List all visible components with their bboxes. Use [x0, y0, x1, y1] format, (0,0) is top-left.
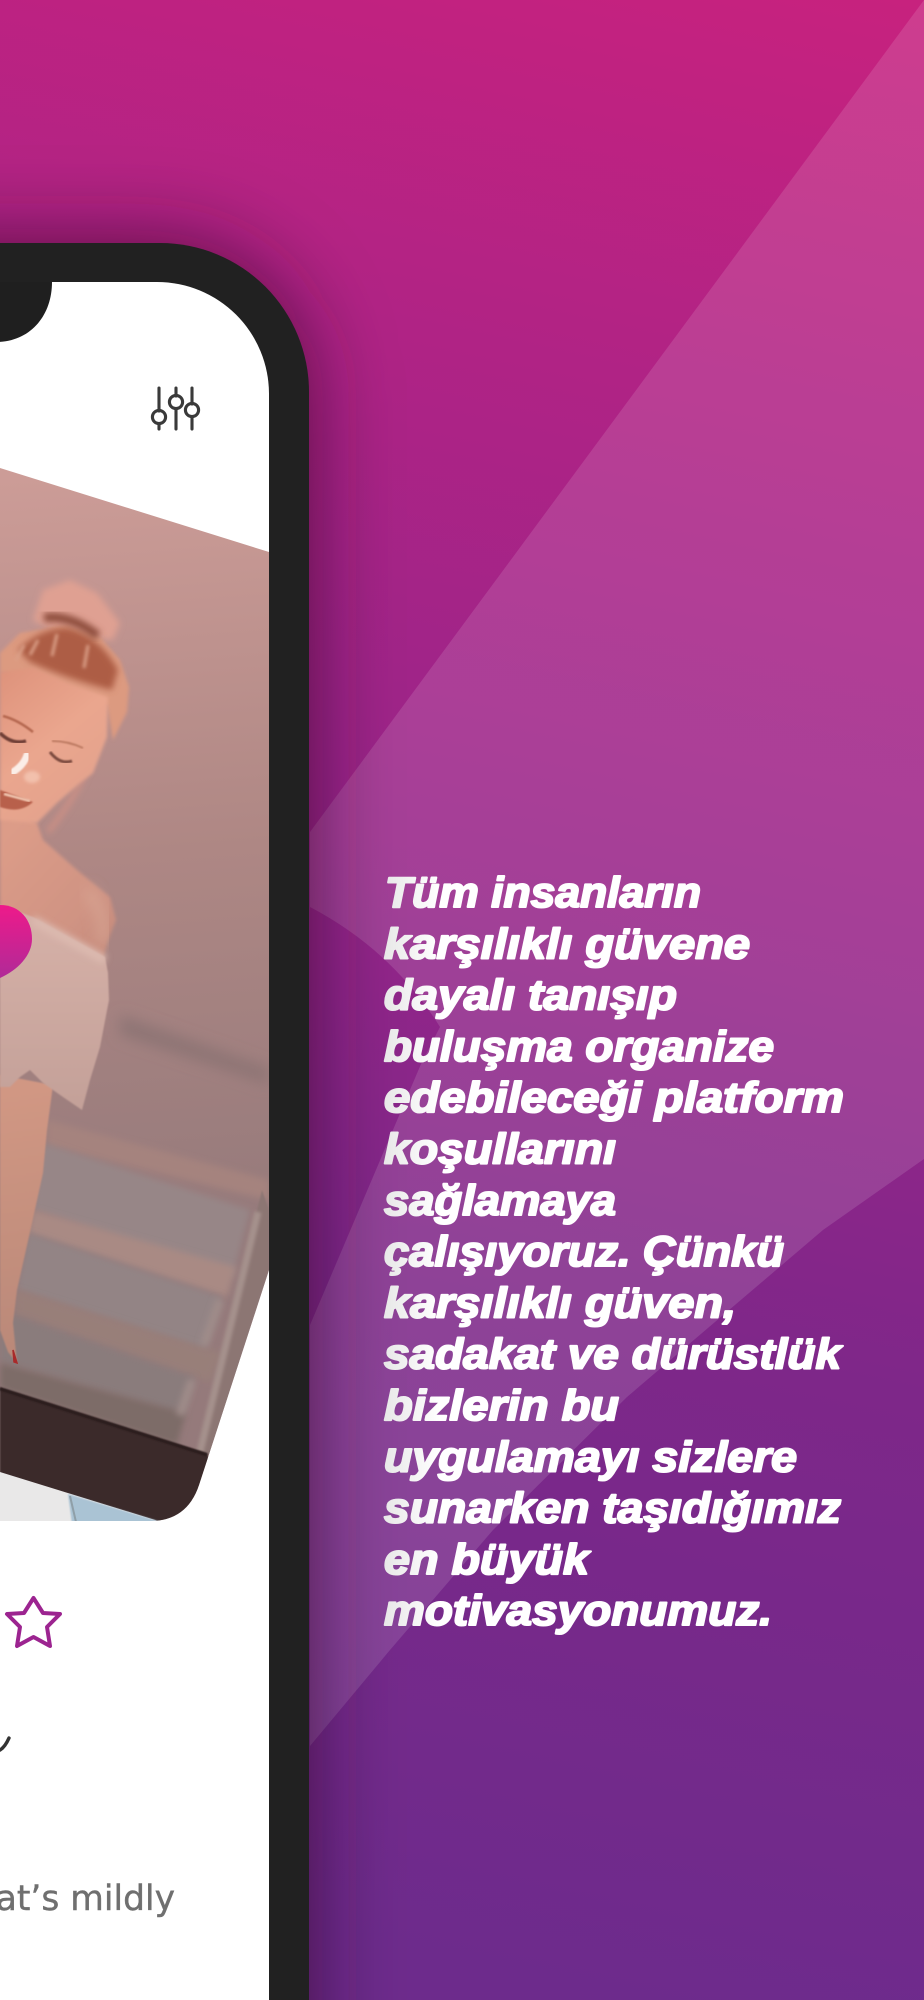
- woman: face: [0, 668, 108, 823]
- main text block: sadakat ve dürüstlük: [384, 1331, 843, 1379]
- background: light diagonal facet: [310, 0, 924, 1746]
- main text block: koşullarını: [384, 1126, 616, 1174]
- main text block: karşılıklı güven,: [384, 1279, 736, 1327]
- stairs: [0, 1015, 269, 1455]
- main text block: en büyük: [384, 1536, 591, 1584]
- white floor and jeans below the stairs: [0, 1472, 158, 1521]
- woman: arm: [0, 1075, 53, 1363]
- main text block: karşılıklı güvene: [384, 920, 750, 968]
- photo card: woman on stairs: [0, 460, 270, 1525]
- phone screen: [0, 282, 269, 2000]
- main text block: sunarken taşıdığımız: [384, 1485, 842, 1533]
- woman: dress band: [33, 920, 105, 960]
- phone drop shadow: [0, 243, 309, 2000]
- phone mockup: [0, 243, 309, 2000]
- main text block: çalışıyoruz. Çünkü: [384, 1228, 784, 1276]
- main text block: buluşma organize: [384, 1023, 774, 1071]
- stair dark edge: [0, 1387, 215, 1525]
- woman: hair bun halo: [33, 580, 120, 640]
- icon: filter sliders: [152, 388, 199, 429]
- main text block: [384, 869, 844, 1635]
- main text block: dayalı tanışıp: [384, 972, 677, 1020]
- phone screen caption fragment: at’s mildly: [0, 1879, 175, 1919]
- main text block: motivasyonumuz.: [384, 1587, 772, 1635]
- woman: hair highlights: [16, 634, 88, 668]
- woman: hair: [0, 625, 129, 740]
- woman: dress: [0, 905, 109, 1110]
- phone notch: [0, 282, 52, 342]
- woman: darker hair band: [18, 628, 118, 690]
- script letter fragment: [0, 1738, 9, 1750]
- main text block: uygulamayı sizlere: [384, 1433, 797, 1481]
- stair rail: [206, 1191, 269, 1455]
- woman: bun knot: [44, 617, 98, 636]
- main text block: Tüm insanların: [385, 869, 701, 917]
- main text block: bizlerin bu: [384, 1382, 619, 1430]
- icon: outlined rating star: [7, 1598, 60, 1646]
- woman: neck and shoulder: [0, 800, 116, 960]
- woman: stray hair strands: [47, 782, 84, 832]
- phone body: [0, 243, 309, 2000]
- main text block: sağlamaya: [384, 1177, 616, 1225]
- main text block: edebileceği platform: [384, 1074, 844, 1122]
- woman: facial features: [0, 716, 83, 810]
- icon: pink heart fragment: [0, 905, 32, 978]
- woman: nail: [13, 1350, 17, 1363]
